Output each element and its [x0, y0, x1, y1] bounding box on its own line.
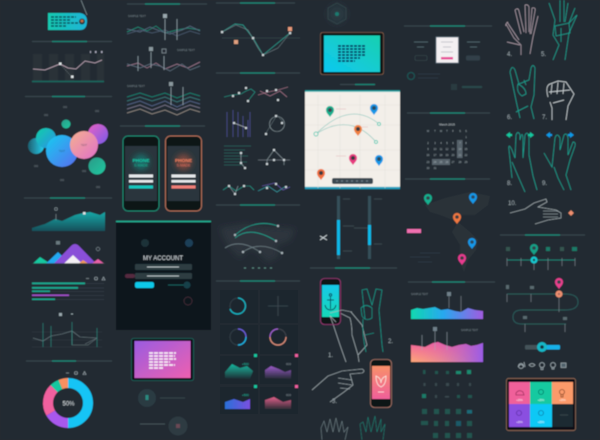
- hand 4: [506, 5, 538, 58]
- bottom hands outline: [321, 416, 385, 440]
- calendar: 22: [465, 154, 468, 157]
- hand 8 with arrows: 8.: [507, 181, 512, 187]
- calendar: 17: [434, 154, 437, 157]
- donut chart 50%: [48, 372, 88, 423]
- hand 2 peace sign: [361, 289, 393, 352]
- hand 7 fist: 7.: [542, 115, 547, 121]
- timeline slider: [506, 244, 577, 270]
- horizontal bar chart: [32, 277, 105, 300]
- tablet colour tiles: +25%: [559, 399, 567, 402]
- calendar: 12: [446, 148, 449, 151]
- hand 10: 10.: [508, 201, 517, 207]
- tablet colour tiles: +25%: [516, 399, 524, 402]
- bubble chart: 000: [34, 165, 39, 168]
- calendar: 29: [465, 161, 468, 164]
- calendar: 26: [446, 161, 449, 164]
- bubble chart: 000: [95, 110, 100, 113]
- wave chart teal-purple: [411, 292, 483, 319]
- calendar: T: [434, 130, 436, 133]
- bubble chart: TEXT: [59, 150, 66, 153]
- calendar: 15: [465, 148, 468, 151]
- calendar: S: [465, 130, 467, 133]
- world map with pins: [407, 192, 490, 272]
- chart: large teal line chart: [221, 24, 300, 56]
- wave line charts: [127, 14, 200, 115]
- phone teal: S-MADE: [134, 164, 149, 168]
- title: my account: MY ACCOUNT: [143, 255, 183, 262]
- phone teal: PHONE: [132, 158, 150, 164]
- hand 10: [508, 199, 574, 224]
- wave chart teal-purple: SAMPLE TEXT: [411, 293, 429, 296]
- panel: my account login: [116, 222, 211, 330]
- calendar: 23: [427, 161, 430, 164]
- phone orange: [166, 136, 202, 211]
- world map with flight arcs: [220, 223, 295, 268]
- calendar: 5: [446, 142, 448, 145]
- phone anchor with hand 1: 1.: [328, 353, 333, 359]
- price tag: [48, 0, 87, 30]
- bubble chart: 000: [82, 170, 87, 173]
- calendar: 16: [427, 154, 430, 157]
- bubble chart: 000: [44, 114, 49, 117]
- vertical marker line chart: [32, 313, 102, 347]
- line chart with stripes: [32, 52, 104, 82]
- calendar: 30: [427, 167, 430, 170]
- serpentine timeline: [506, 278, 578, 332]
- calendar: 18: [440, 154, 443, 157]
- calendar: [427, 122, 468, 170]
- bubble chart: 000: [60, 179, 65, 182]
- calendar: 14: [459, 148, 462, 151]
- panel: dashboard tiles: 000: [286, 362, 291, 366]
- tablet colour tiles: [506, 378, 576, 430]
- tablet colour tiles: +25%: [538, 399, 545, 402]
- panel: dashboard tiles: [220, 290, 298, 414]
- tablet pink: [132, 338, 194, 380]
- hand 6 rock sign: 6.: [507, 115, 512, 121]
- calendar: 7: [459, 142, 461, 145]
- phone anchor with hand 1: [320, 278, 367, 362]
- hand 7 fist: [542, 81, 574, 121]
- calendar: T: [446, 130, 448, 133]
- faint icon circles: [138, 389, 188, 436]
- bubble chart: 000: [63, 106, 68, 109]
- hand 4: 4.: [507, 52, 512, 58]
- calendar: 21: [459, 154, 462, 157]
- phone orange: S-MADE: [177, 164, 191, 168]
- sliders: [320, 196, 382, 259]
- area chart teal: [32, 208, 105, 231]
- phones: login screens: [123, 136, 202, 211]
- calendar: M: [427, 130, 429, 133]
- mountain chart: [32, 241, 105, 264]
- wave line charts: SAMPLE TEXT: [177, 48, 195, 52]
- calendar: 3: [434, 142, 436, 145]
- tablet cyan: [320, 32, 384, 74]
- toggle switch: [525, 342, 560, 352]
- calendar: S: [459, 130, 461, 133]
- wave line charts: SAMPLE TEXT: [127, 84, 145, 88]
- bubble chart: TEXT: [81, 144, 88, 147]
- wave line charts: SAMPLE TEXT: [128, 14, 146, 18]
- wave chart pink-orange: [411, 327, 483, 362]
- icon row: [518, 362, 566, 370]
- tablet colour tiles: +25%: [516, 421, 524, 424]
- calendar: W: [440, 130, 443, 133]
- calendar: 10: [434, 148, 437, 151]
- panel: dashboard tiles: +500: [242, 393, 249, 397]
- donut chart 50%: 50%: [62, 402, 75, 408]
- hexagon icon: [328, 3, 346, 24]
- calendar: 28: [459, 161, 462, 164]
- calendar: 1: [465, 136, 467, 139]
- calendar: 11: [440, 148, 443, 151]
- hand 5: 5.: [541, 52, 546, 58]
- calendar: 31: [434, 167, 437, 170]
- wave chart pink-orange: SAMPLE TEXT: [461, 329, 479, 332]
- phone orange: PHONE: [175, 158, 193, 164]
- chart grid of small line charts: [223, 87, 290, 195]
- hand 9 with arrows: 9.: [542, 181, 547, 187]
- phone teal: [123, 136, 159, 211]
- hand 2 peace sign: 2.: [388, 339, 393, 345]
- calendar: 8: [465, 142, 467, 145]
- small icon grid: [421, 370, 472, 438]
- bubble chart: 000: [96, 186, 101, 189]
- calendar: 13: [452, 148, 455, 151]
- calendar: 24: [434, 161, 437, 164]
- panel: dashboard tiles: +500: [242, 362, 249, 366]
- phone coral: [370, 360, 392, 408]
- hand 8 with arrows: [506, 132, 537, 192]
- calendar: 25: [440, 161, 443, 164]
- calendar: 6: [452, 142, 454, 145]
- calendar: 9: [427, 148, 429, 151]
- icon: anchor: [325, 294, 336, 310]
- calendar: 20: [452, 154, 455, 157]
- hand 6 rock sign: [507, 66, 535, 121]
- hand 3 pointing: [312, 369, 364, 405]
- calendar: 4: [440, 142, 442, 145]
- calendar: 27: [452, 161, 455, 164]
- calendar: 2: [427, 142, 429, 145]
- hand 3 pointing: 3.: [332, 399, 337, 405]
- tablet colour tiles: +25%: [538, 421, 545, 424]
- hand 9 with arrows: [542, 132, 575, 190]
- calendar: 19: [446, 154, 449, 157]
- panel: light route map: [305, 91, 400, 189]
- calendar: F: [452, 130, 454, 133]
- hand 5: [541, 0, 577, 60]
- panel: subscribe pricing card: [408, 37, 482, 90]
- panel: dashboard tiles: 000: [286, 393, 291, 397]
- bubble chart: [28, 106, 108, 189]
- calendar: March 2015: [439, 122, 455, 126]
